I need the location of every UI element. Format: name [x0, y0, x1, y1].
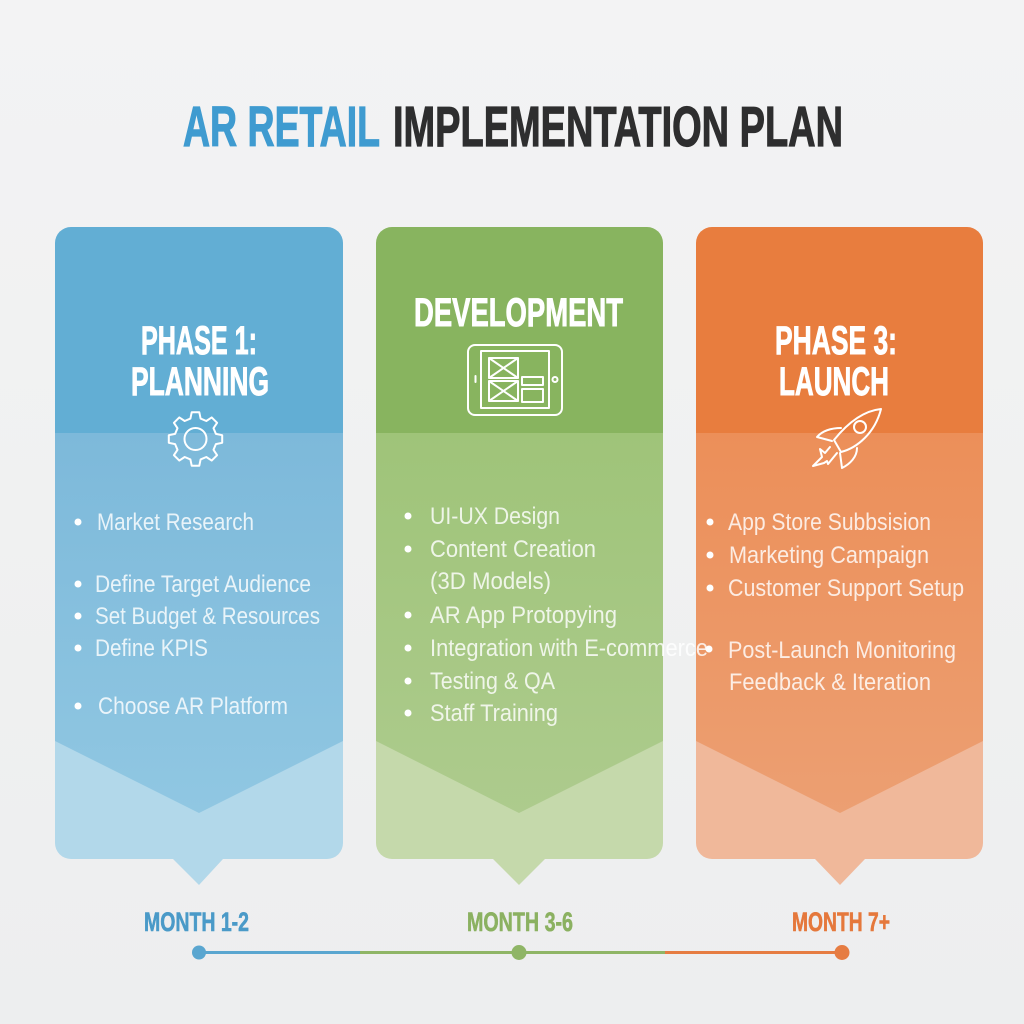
heading: phase 1 planning	[131, 319, 269, 404]
timeline label: month 1-2: MONTH 1-2	[144, 907, 249, 937]
title: AR RETAIL	[183, 95, 380, 159]
list: planning tasks: Define KPIS	[95, 635, 208, 662]
list: development tasks: Testing & QA	[430, 668, 555, 695]
panel body: launch	[696, 433, 983, 885]
list: launch tasks: Marketing Campaign	[729, 542, 929, 569]
heading: phase 3 launch	[775, 319, 897, 404]
timeline line	[199, 951, 842, 954]
timeline marker: month 3-6	[512, 945, 526, 960]
title	[183, 95, 843, 159]
list: planning tasks: Choose AR Platform	[98, 693, 288, 720]
heading: phase 3 launch: LAUNCH	[779, 360, 889, 404]
list: launch tasks	[706, 509, 964, 696]
list: development tasks	[404, 503, 708, 727]
timeline	[144, 907, 890, 960]
timeline marker: month 1-2	[192, 946, 206, 960]
list: development tasks: Content Creation	[430, 536, 596, 563]
list: planning tasks	[74, 509, 320, 720]
panel: phase 1 planning	[55, 227, 343, 885]
panel: phase 3 launch	[696, 227, 983, 885]
panel content band: development	[376, 433, 663, 813]
panel: development	[376, 227, 708, 885]
list: planning tasks: Set Budget & Resources	[95, 603, 320, 630]
list: launch tasks: Customer Support Setup	[728, 575, 964, 602]
heading: phase 1 planning: PHASE 1:	[141, 319, 257, 363]
timeline marker: month 7+	[834, 945, 850, 960]
icon: tablet wireframe	[468, 345, 562, 415]
panel header: planning	[55, 227, 343, 433]
panel body: planning	[55, 433, 343, 885]
timeline label: month 7+: MONTH 7+	[792, 907, 890, 937]
list: development tasks: Integration with E-commerce	[430, 635, 708, 662]
list: development tasks: (3D Models)	[430, 568, 551, 595]
list: planning tasks: Define Target Audience	[95, 571, 311, 598]
timeline label: month 3-6: MONTH 3-6	[467, 907, 573, 937]
icon: gear	[169, 412, 222, 466]
heading: development: DEVELOPMENT	[414, 291, 623, 335]
panel header: launch	[696, 227, 983, 433]
list: launch tasks: Post-Launch Monitoring	[728, 637, 956, 664]
panel content band: planning	[55, 433, 343, 813]
list: launch tasks: Feedback & Iteration	[729, 669, 931, 696]
panel body: development	[376, 433, 663, 885]
icon: rocket	[813, 409, 881, 468]
list: development tasks: UI-UX Design	[430, 503, 560, 530]
heading: phase 3 launch: PHASE 3:	[775, 319, 897, 363]
panel header: development	[376, 227, 663, 433]
list: development tasks: AR App Protopying	[430, 602, 617, 629]
heading: phase 1 planning: PLANNING	[131, 360, 269, 404]
list: development tasks: Staff Training	[430, 700, 558, 727]
list: launch tasks: App Store Subbsision	[728, 509, 931, 536]
panel content band: launch	[696, 433, 983, 813]
list: planning tasks: Market Research	[97, 509, 254, 536]
